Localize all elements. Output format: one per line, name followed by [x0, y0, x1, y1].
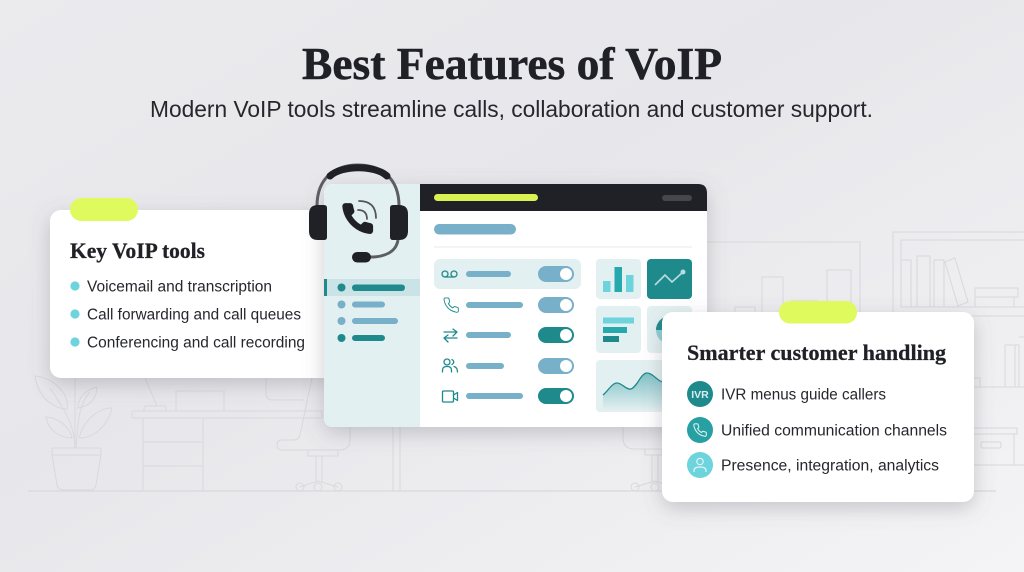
- tile: bar chart: [596, 259, 641, 299]
- tile: pie chart: [647, 306, 692, 353]
- window body: [324, 184, 707, 427]
- header grey pill: [662, 195, 692, 201]
- settings rows: [434, 259, 581, 404]
- plant: [35, 376, 112, 490]
- item: unified channels: [687, 417, 947, 443]
- item: presence: [687, 452, 939, 478]
- item: IVR menus: [687, 381, 886, 407]
- signal waves: [358, 201, 376, 219]
- header lime bar: [434, 194, 538, 201]
- item: IVR menus: IVR: [691, 389, 709, 401]
- sidebar menu: [324, 279, 420, 342]
- row: voicemail: [434, 259, 581, 289]
- list: tools: Voicemail and transcription: [87, 278, 272, 296]
- content title pill: [434, 224, 516, 234]
- row: call: [444, 297, 574, 313]
- item: IVR menus: IVR menus guide callers: [721, 386, 886, 404]
- lime tab: [779, 301, 857, 324]
- panel: smarter customer handling: [662, 301, 974, 502]
- desk: [132, 378, 400, 491]
- card background: [662, 312, 974, 502]
- panel: dashboard window: [324, 184, 707, 427]
- right chair: [623, 427, 672, 491]
- list: tools: [70, 278, 305, 352]
- floor line: [28, 490, 996, 492]
- tile: area chart: [596, 360, 692, 412]
- phone glyph: [342, 203, 373, 234]
- microphone arm: [370, 240, 398, 257]
- card background: [50, 210, 335, 378]
- subtitle: Modern VoIP tools streamline calls, collaboration and customer support.: [150, 96, 873, 122]
- bookcase: [893, 232, 1024, 465]
- left chair: [266, 378, 350, 491]
- item: presence: Presence, integration, analytics: [721, 458, 939, 474]
- lime tab: [70, 198, 138, 221]
- heading: key VoIP tools: Key VoIP tools: [70, 238, 205, 263]
- header bar: [420, 184, 707, 211]
- icon: headset with phone: [309, 165, 408, 262]
- item: unified channels: Unified communication channels: [721, 422, 947, 440]
- row: video: [442, 388, 574, 404]
- wall shelf with boxes: [707, 242, 860, 313]
- sidebar: [324, 184, 420, 427]
- ear cups: [309, 205, 327, 240]
- row: forwarding: [444, 327, 574, 343]
- list: tools: Call forwarding and call queues: [87, 306, 301, 324]
- panel: key VoIP tools: [50, 198, 335, 378]
- title: Best Features of VoIP: [302, 38, 722, 89]
- tile: horizontal bars: [596, 306, 641, 353]
- tile: line chart: [647, 259, 692, 299]
- office line art background: [28, 232, 1024, 491]
- list: tools: Conferencing and call recording: [87, 334, 305, 352]
- headband: [317, 165, 399, 206]
- heading: Smarter customer handling: [687, 340, 946, 365]
- row: conferencing: [442, 358, 574, 374]
